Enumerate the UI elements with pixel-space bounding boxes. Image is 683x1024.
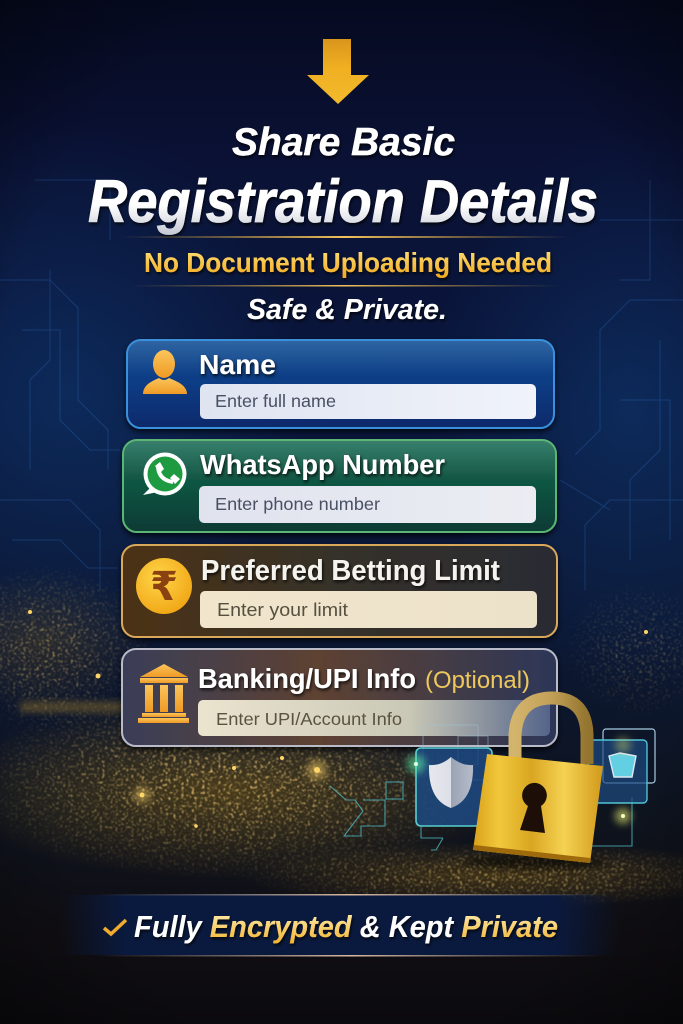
icon: whatsapp xyxy=(143,452,186,496)
label: optional: (Optional) xyxy=(425,667,530,694)
placeholder: upi: Enter UPI/Account Info xyxy=(216,709,402,729)
icon: rupee coin xyxy=(136,558,192,614)
panel: shield card xyxy=(330,725,632,850)
icon: rupee coin: ₹ xyxy=(150,564,178,610)
panel: trash card xyxy=(588,729,655,824)
label: betting limit: Preferred Betting Limit xyxy=(201,555,500,587)
input: full name xyxy=(200,384,536,419)
circuit decoration xyxy=(0,180,683,590)
panel: name xyxy=(127,340,554,428)
icon: cart xyxy=(609,753,636,777)
divider xyxy=(130,285,560,286)
title: Registration Details: Registration Details xyxy=(88,168,598,235)
icon: check xyxy=(104,920,126,934)
icon: person xyxy=(143,350,187,394)
panel: banking xyxy=(122,649,557,746)
security graphics xyxy=(330,698,655,869)
placeholder: phone: Enter phone number xyxy=(215,494,380,514)
input: upi xyxy=(198,700,550,736)
divider xyxy=(120,236,570,238)
icon: padlock xyxy=(465,698,605,869)
label: whatsapp: WhatsApp Number xyxy=(200,449,445,480)
tagline: safe and private: Safe & Private. xyxy=(247,294,447,326)
input: phone xyxy=(199,486,536,523)
arrow icon xyxy=(307,39,369,104)
label: banking: Banking/UPI Info xyxy=(198,663,416,694)
placeholder: limit: Enter your limit xyxy=(217,600,348,620)
panel: betting limit xyxy=(122,545,557,637)
footer band xyxy=(60,894,620,956)
subtitle: no document uploading: No Document Uploading Needed xyxy=(144,247,552,278)
panel: whatsapp xyxy=(123,440,556,532)
placeholder: full name: Enter full name xyxy=(215,391,336,411)
input: limit xyxy=(200,591,537,628)
icon: bank xyxy=(138,664,189,723)
title: Share Basic: Share Basic xyxy=(232,121,455,164)
footer text: Fully Encrypted & Kept Private xyxy=(134,909,558,944)
icon: shield xyxy=(429,757,473,808)
label: name: Name xyxy=(199,349,276,380)
